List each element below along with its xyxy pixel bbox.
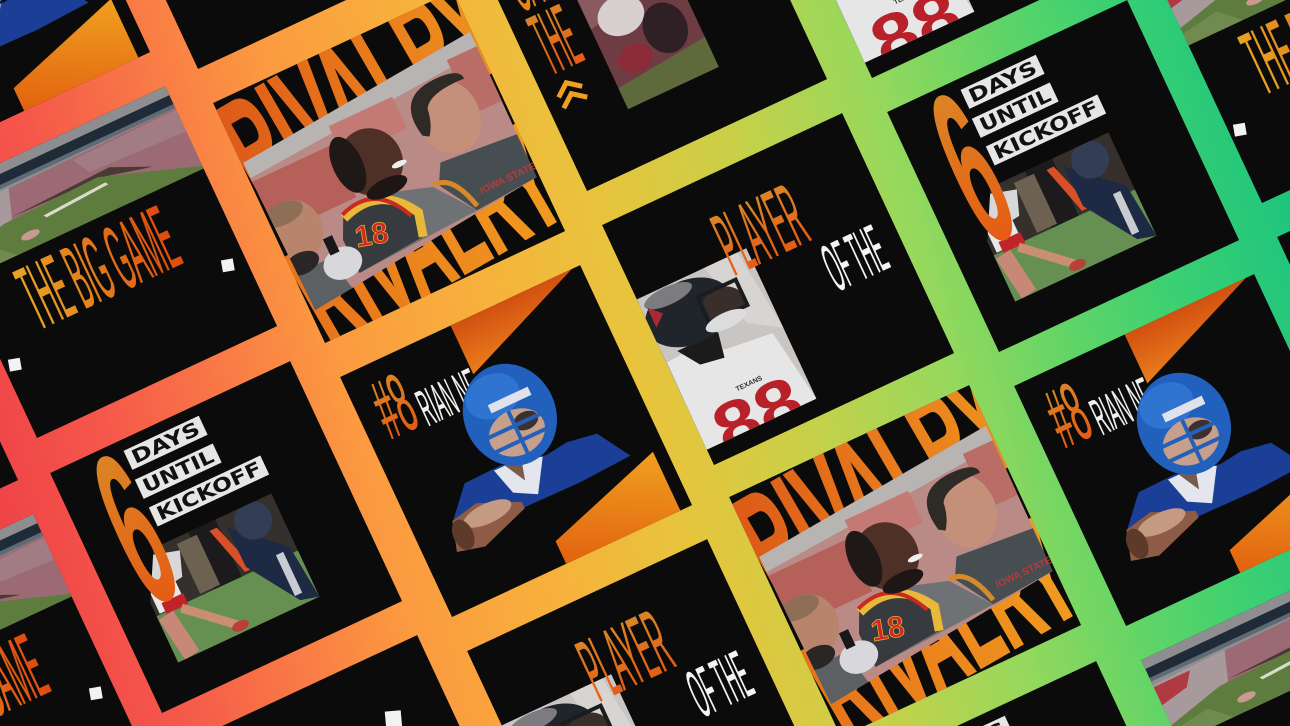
photo: texans player [633,248,817,452]
jersey number: 18 [868,610,907,648]
jersey number: 18 [352,216,391,254]
jersey team name: TEXANS [735,375,764,393]
label: days [930,716,1014,726]
card: player of the, bottom: PLAYER [565,593,686,720]
accent square left [8,358,22,372]
card: bottom partial with square [222,635,460,726]
card: quarterback, top left [0,0,150,122]
orange triangle [0,0,138,111]
accent square left [1233,123,1247,137]
card: quarterback, centre left [340,265,692,617]
photo: teammates looking up [724,385,1068,713]
card: far left partial [0,442,18,488]
big number six: 6 [900,46,1044,291]
card: six days until kickoff, left [50,361,402,713]
photo: quarterback [452,364,630,552]
jersey number: 88 [701,361,815,469]
card: the big game, lower left [0,514,145,726]
card: game of the, top centre [472,0,827,191]
card: rivalry, upper [213,0,565,343]
label: days [124,416,208,471]
icon: chevrons [554,77,587,108]
card: the big game, left [0,86,277,438]
top triangle [1125,278,1269,383]
label: until [972,82,1059,139]
bottom triangle [1213,461,1290,573]
card: quarterback, centre left: RIAN NE [409,358,489,437]
label: until [135,443,222,500]
photo: crowd of players [566,0,719,109]
label: until: UNTIL [976,85,1055,137]
label: kickoff [149,455,270,527]
accent square right [221,258,235,272]
card: player of the, bottom [463,539,819,726]
card: six days, bottom partial [856,661,1208,726]
photo: stadium [0,86,204,280]
label: days: DAYS [128,418,204,469]
jersey number text: #8 [1032,365,1104,465]
photo: players at the line [150,494,320,662]
big number six: 6 [63,407,207,652]
label: kickoff: KICKOFF [153,458,265,525]
card: player of the, centre: PLAYER [700,167,821,294]
top triangle [450,269,572,374]
label: kickoff [986,94,1107,166]
card: right edge partial [1277,125,1290,477]
card: quarterback, right [1014,274,1290,626]
card: player of the, top right [756,0,1117,91]
jersey number text: #8 [358,356,430,456]
accent square [385,710,402,726]
card: the big game, top right [1150,0,1290,203]
photo: players at the line [959,123,1165,308]
card: top partial [166,0,346,69]
accent square [89,686,103,700]
label: days [961,55,1045,110]
card: rivalry, lower [698,330,1123,726]
card: the big game, bottom right [1141,548,1290,726]
card: player of the, centre [598,113,959,478]
bottom triangle [556,452,680,564]
jersey lettering: IOWA STATE [994,555,1054,591]
label: until: UNTIL [139,446,218,498]
label: kickoff: KICKOFF [990,97,1102,164]
photo: quarterback [1066,338,1290,567]
photo: teammates looking up [243,32,537,310]
label: days: DAYS [965,57,1041,108]
card: player of the, centre: OF THE [812,211,898,305]
card: six days until kickoff, right [871,0,1239,352]
jersey lettering: IOWA STATE [478,161,538,197]
